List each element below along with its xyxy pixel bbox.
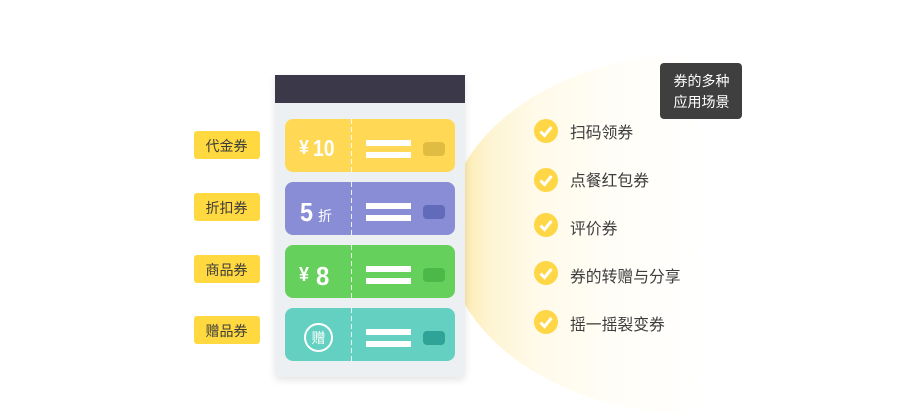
coupon card: ¥8 green: 8 [316, 261, 329, 291]
label: 商品券 [194, 255, 260, 283]
callout: 券的多种应用场景: 券的多种 [674, 73, 730, 89]
coupon card: 赠 teal [285, 308, 455, 361]
coupon card: 5折 purple: 折 [318, 208, 332, 224]
label: 代金券 [194, 131, 260, 159]
list item: 评价券 [534, 213, 617, 238]
label: 赠品券: 赠品券 [206, 323, 248, 339]
background glow: yellow ellipse [465, 64, 616, 404]
list item: 评价券: 评价券 [570, 221, 617, 238]
label: 代金券: 代金券 [206, 138, 248, 154]
list item: 点餐红包券 [534, 168, 649, 192]
icon: gift circle: 赠 [312, 330, 326, 346]
list item: 摇一摇裂变券 [534, 310, 665, 334]
label: 赠品券 [194, 316, 260, 344]
list item: 券的转赠与分享 [534, 261, 681, 286]
list item: 扫码领券 [534, 119, 633, 143]
icon: gift circle [304, 323, 333, 352]
callout: 券的多种应用场景: 应用场景 [674, 94, 730, 110]
coupon card: 5折 purple: 5 [300, 197, 313, 227]
list item: 摇一摇裂变券: 摇一摇裂变券 [570, 317, 665, 334]
label: 商品券: 商品券 [206, 262, 248, 278]
callout: 券的多种应用场景 [660, 63, 742, 119]
coupon card: ¥10 yellow [285, 119, 455, 172]
coupon card: ¥10 yellow: ¥ [298, 137, 309, 159]
label: 折扣券 [194, 193, 260, 221]
coupon card: 5折 purple [285, 182, 455, 235]
phone header bar [275, 75, 465, 103]
label: 折扣券: 折扣券 [206, 200, 248, 216]
coupon card: ¥8 green [285, 245, 455, 298]
panel: phone [275, 75, 465, 377]
coupon card: ¥8 green: ¥ [298, 264, 309, 286]
list item: 券的转赠与分享: 券的转赠与分享 [570, 269, 681, 286]
list item: 扫码领券: 扫码领券 [570, 125, 633, 142]
list item: 点餐红包券: 点餐红包券 [570, 173, 649, 190]
coupon card: ¥10 yellow: 10 [313, 135, 334, 161]
